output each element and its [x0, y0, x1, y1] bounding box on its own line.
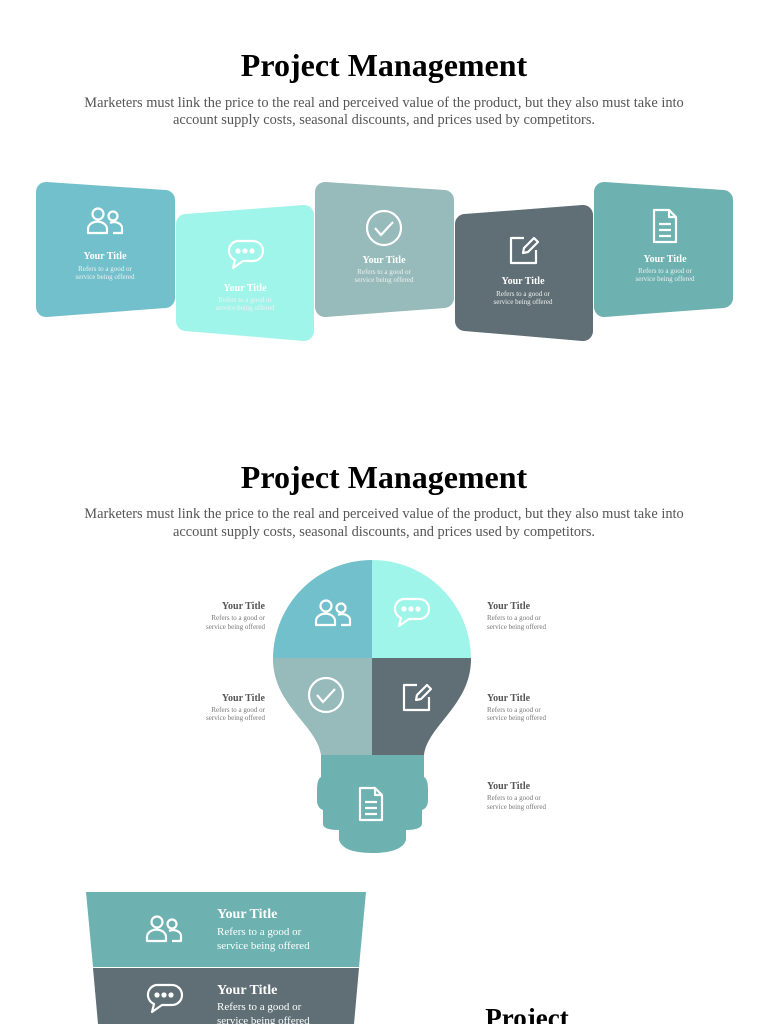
card 5: service being offered [636, 275, 695, 283]
subtitle: section 2: Marketers must link the price to the real and perceived value of the product, but they also must take into [84, 506, 684, 522]
card 3: Your Title [362, 255, 406, 266]
bulb labels: Your Title [222, 601, 266, 612]
card 4: Your Title [501, 276, 545, 287]
bulb labels: Refers to a good or [211, 706, 266, 714]
bulb labels: Refers to a good or [487, 794, 541, 802]
funnel list: Your Title [217, 983, 277, 998]
card 1: Refers to a good or [78, 265, 132, 273]
bulb labels: Your Title [487, 781, 531, 792]
subtitle: section 1: Marketers must link the price to the real and perceived value of the product, but they also must take into [84, 95, 684, 111]
card 2 [186, 215, 304, 331]
card 5: Refers to a good or [638, 267, 692, 275]
card 4 [465, 215, 583, 331]
card 3: service being offered [355, 276, 414, 284]
card 1 [46, 192, 165, 307]
card 2: Your Title [223, 283, 267, 294]
bulb labels: service being offered [487, 803, 546, 811]
card 5: Your Title [643, 254, 687, 265]
card 3 [325, 192, 444, 307]
bulb labels: service being offered [487, 623, 546, 631]
bulb labels: service being offered [206, 623, 266, 631]
bulb labels: Refers to a good or [487, 614, 541, 622]
bulb labels: Refers to a good or [211, 614, 266, 622]
card 2: service being offered [216, 304, 275, 312]
title: section 2: Project Management [241, 459, 528, 495]
bulb labels: Your Title [222, 693, 266, 704]
card 2: Refers to a good or [218, 296, 272, 304]
card 4: Refers to a good or [496, 290, 550, 298]
subtitle: section 2: account supply costs, seasonal discounts, and prices used by competitors. [173, 524, 595, 540]
funnel list: Your Title [217, 907, 277, 922]
card 4: service being offered [494, 298, 553, 306]
bulb labels [206, 601, 546, 811]
card 1: Your Title [83, 251, 127, 262]
funnel list: Refers to a good or [217, 1001, 302, 1013]
funnel list [86, 892, 366, 1024]
funnel list: Refers to a good or [217, 926, 302, 938]
bulb labels: Your Title [487, 601, 531, 612]
funnel list: service being offered [217, 940, 310, 952]
card 1: service being offered [76, 273, 135, 281]
subtitle: section 1: account supply costs, seasonal discounts, and prices used by competitors. [173, 112, 595, 128]
bulb labels: Refers to a good or [487, 706, 541, 714]
card 5 [604, 192, 723, 307]
bulb labels: Your Title [487, 693, 531, 704]
lightbulb diagram [270, 558, 474, 853]
card 3: Refers to a good or [357, 268, 411, 276]
bulb labels: service being offered [487, 714, 546, 722]
title: section 1: Project Management [241, 47, 528, 83]
bulb labels: service being offered [206, 714, 266, 722]
